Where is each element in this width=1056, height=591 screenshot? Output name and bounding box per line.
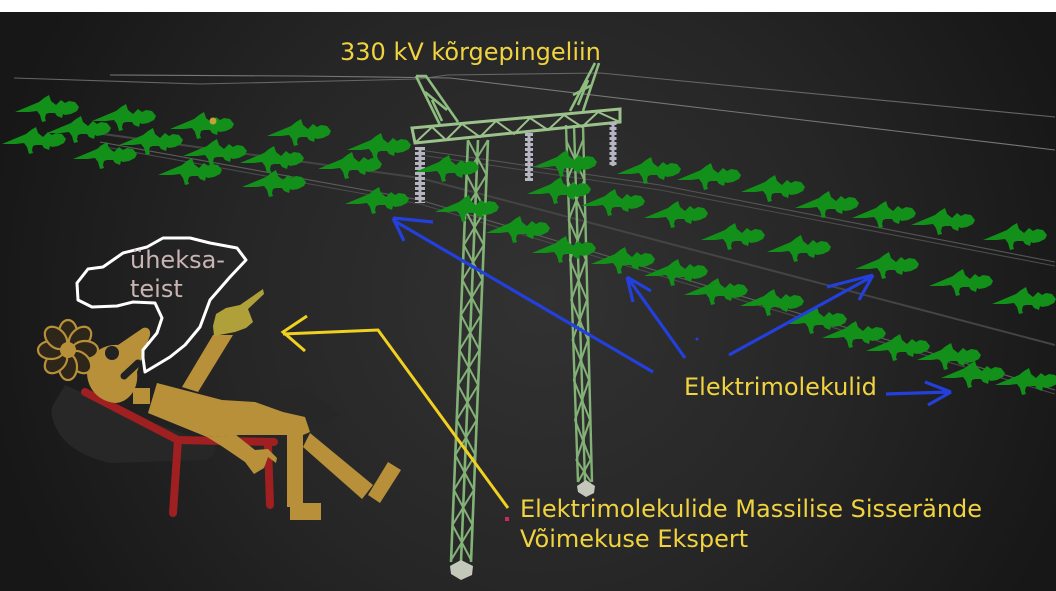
blue dot xyxy=(696,338,698,340)
raised foot xyxy=(368,462,401,503)
speech bubble xyxy=(77,238,246,372)
pointing hand xyxy=(213,289,264,336)
raised arm xyxy=(182,335,233,392)
tower right peak xyxy=(570,63,599,111)
shadow blobs xyxy=(52,305,340,463)
green gecko molecules xyxy=(2,95,1056,395)
top white strip xyxy=(0,0,1056,12)
tower foundations xyxy=(450,480,595,580)
arrow to molecule right xyxy=(886,382,951,405)
eye xyxy=(105,346,119,360)
yellow arrow to expert's finger xyxy=(283,316,508,508)
speech text: teist xyxy=(130,275,183,303)
bent leg xyxy=(303,433,373,499)
transmission tower xyxy=(412,63,620,562)
arrow to molecule upper right xyxy=(729,275,873,355)
flower hair xyxy=(38,320,98,380)
mouth xyxy=(124,363,138,376)
small orange dot xyxy=(210,118,216,124)
label: expert: Elektrimolekulide Massilise Sisserände xyxy=(520,495,982,523)
reclining expert figure xyxy=(38,289,401,520)
blue arrows xyxy=(393,218,951,405)
planted foot xyxy=(290,503,321,520)
chair xyxy=(85,392,274,513)
arrow to molecule left xyxy=(393,218,653,372)
label: expert: Võimekuse Ekspert xyxy=(520,525,748,553)
tower crossarm xyxy=(412,109,620,143)
lower arm and hand xyxy=(207,435,277,474)
head xyxy=(87,328,150,403)
neck xyxy=(133,388,150,404)
speech text: üheksa- xyxy=(130,246,225,274)
arrow to molecule centre xyxy=(627,277,685,358)
tower right leg xyxy=(566,125,592,482)
tower left peak xyxy=(416,76,458,125)
red dot xyxy=(505,517,509,521)
label: Elektrimolekulid: Elektrimolekulid xyxy=(684,373,877,401)
power line wires xyxy=(14,73,1055,394)
insulators xyxy=(420,122,613,203)
body xyxy=(148,383,310,507)
title: 330 kV kõrgepingeliin xyxy=(340,38,601,66)
tower left leg xyxy=(451,140,488,562)
